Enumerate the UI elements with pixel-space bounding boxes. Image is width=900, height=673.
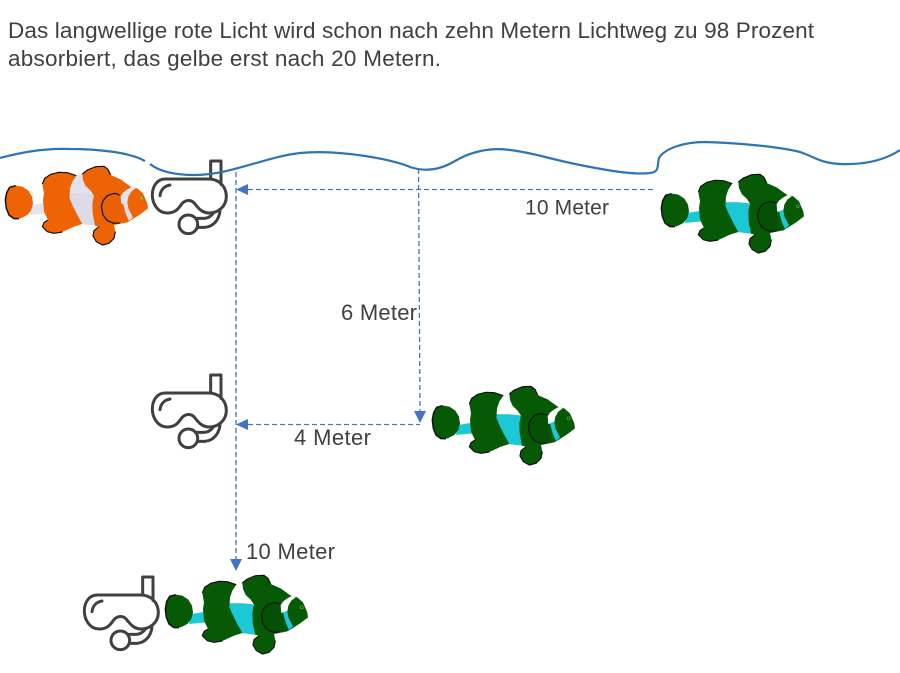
icon: green clownfish bottom (165, 575, 308, 654)
arrow: vertical 10 meter path to lower diver (230, 172, 242, 571)
arrow: horizontal 10 meter light path (236, 184, 655, 195)
icon: green clownfish middle (432, 386, 575, 465)
icon: orange clownfish (5, 166, 148, 245)
label: 10 meter horizontal: 10 Meter (525, 196, 609, 220)
arrow: horizontal 4 meter path (236, 419, 420, 430)
title: Das langwellige rote Licht wird schon nach zehn Metern Lichtweg zu 98 Prozent (8, 18, 815, 43)
label: 4 meter: 4 Meter (294, 425, 371, 450)
icon: green clownfish top right (661, 174, 804, 253)
icon: snorkel mask bottom (84, 577, 158, 650)
icon: snorkel mask top (152, 161, 226, 234)
water surface line (0, 142, 900, 175)
label: 6 meter: 6 Meter (341, 300, 417, 325)
title: absorbiert, das gelbe erst nach 20 Metern. (8, 46, 441, 71)
arrow: vertical 6 meter path (414, 169, 426, 423)
icon: snorkel mask middle (152, 375, 226, 448)
label: 10 meter vertical: 10 Meter (246, 539, 335, 564)
title (8, 18, 815, 71)
